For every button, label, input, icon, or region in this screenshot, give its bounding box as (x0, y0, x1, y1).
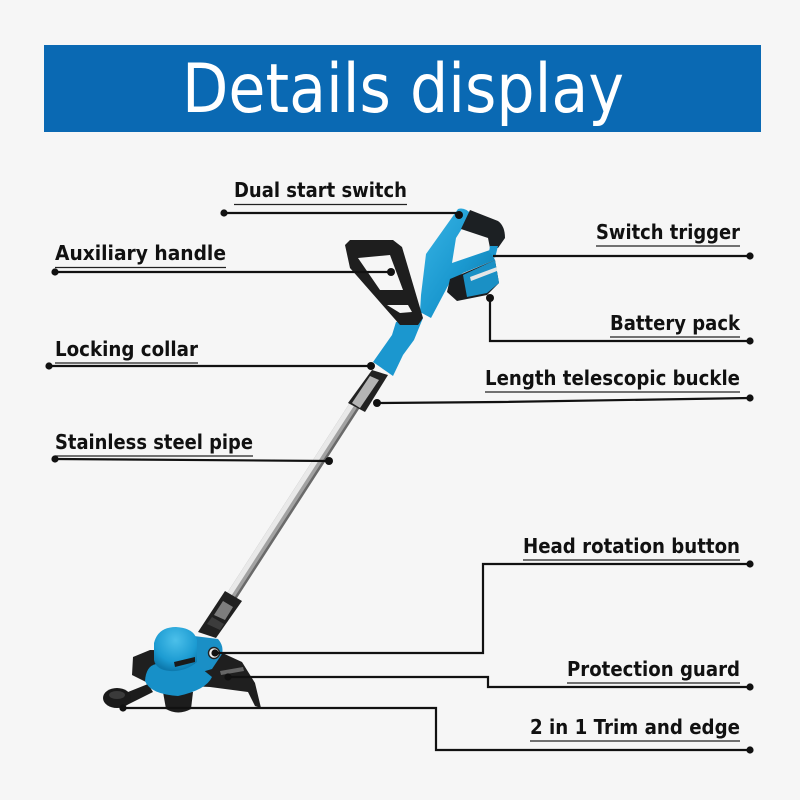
callout: length telescopic buckle: Length telescopic buckle (485, 366, 740, 390)
head arm (194, 636, 222, 674)
callout: 2 in 1 trim and edge: 2 in 1 Trim and edge (530, 715, 740, 739)
callout: protection guard: Protection guard (567, 657, 740, 681)
callout: head rotation button (211, 534, 754, 657)
edge wheel (103, 684, 153, 708)
callout: locking collar: Locking collar (55, 337, 198, 361)
product: cordless grass trimmer (103, 209, 505, 713)
lower pipe connector (198, 591, 242, 638)
callout: switch trigger: Switch trigger (596, 220, 740, 244)
telescopic buckle (348, 370, 388, 412)
guard (132, 650, 261, 708)
callout: battery pack (486, 294, 754, 345)
callout: 2 in 1 trim and edge (119, 704, 754, 754)
title text: Details display (182, 50, 624, 129)
locking collar (373, 318, 423, 376)
callout: head rotation button: Head rotation button (523, 534, 740, 558)
main body (420, 209, 495, 318)
callout: locking collar (45, 337, 375, 370)
callout: stainless steel pipe: Stainless steel pipe (55, 430, 253, 454)
auxiliary handle (345, 240, 423, 325)
trigger (489, 246, 498, 258)
callout: dual start switch: Dual start switch (234, 178, 407, 202)
callout: length telescopic buckle (373, 366, 754, 407)
callout: auxiliary handle: Auxiliary handle (55, 241, 226, 265)
title banner (44, 45, 761, 132)
callout: switch trigger (493, 220, 754, 260)
stainless steel pipe (228, 404, 358, 600)
callout: stainless steel pipe (51, 430, 333, 465)
spool (163, 692, 193, 712)
callout: auxiliary handle (51, 241, 395, 276)
callout: protection guard (224, 657, 754, 691)
head rotation button (208, 648, 220, 658)
motor dome (154, 627, 197, 671)
callout: battery pack: Battery pack (610, 311, 741, 335)
rear grip (461, 210, 505, 248)
callout: dual start switch (220, 178, 463, 219)
head badge (174, 657, 195, 667)
motor base (145, 664, 212, 696)
battery pack (447, 260, 499, 301)
